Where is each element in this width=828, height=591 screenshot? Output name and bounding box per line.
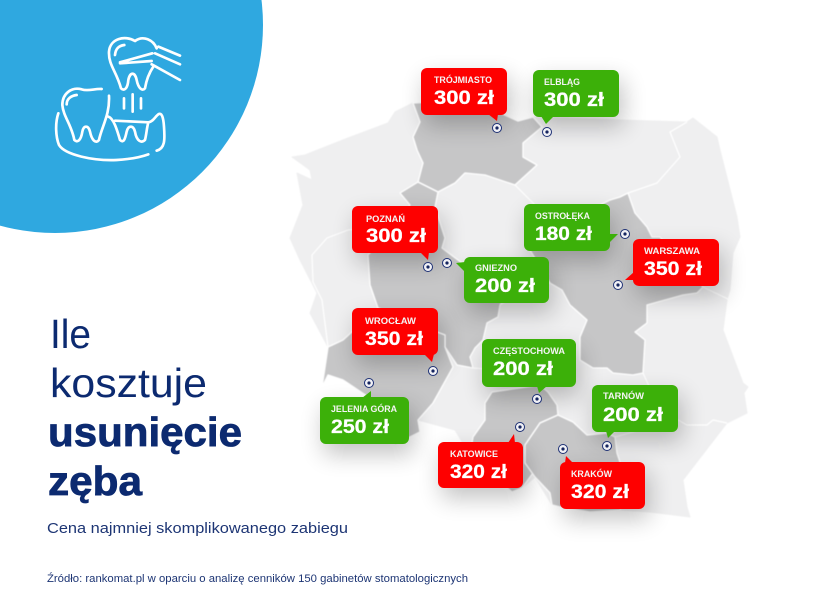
callout: Warszawa <box>625 239 719 286</box>
callout: Tarnow <box>592 385 678 438</box>
callout: Gniezno: 200 zł <box>475 276 536 297</box>
pin: Gniezno <box>442 258 452 268</box>
callout: Ostroleka: OSTROŁĘKA <box>535 211 590 221</box>
region: Mazowieckie <box>530 193 703 375</box>
region: Dolnoslaskie <box>322 308 453 445</box>
region borders <box>312 122 730 437</box>
callout: Krakow <box>560 456 645 509</box>
callout: Krakow: KRAKÓW <box>571 468 612 479</box>
callout: Czestochowa: 200 zł <box>493 359 554 380</box>
callout: Elblag <box>533 70 619 124</box>
pin: Tarnow <box>602 442 612 450</box>
pin: Poznan <box>424 262 432 272</box>
pin: Elblag <box>542 128 552 136</box>
callout: Poznan: 300 zł <box>366 226 427 247</box>
pin: Katowice <box>516 422 524 432</box>
callout: Katowice <box>438 434 523 488</box>
callout: Jelenia Gora: JELENIA GÓRA <box>331 403 397 414</box>
pin: Warszawa <box>614 280 622 290</box>
callout: Trojmiasto: 300 zł <box>434 88 495 109</box>
pin: Wroclaw <box>428 366 438 376</box>
map of Poland <box>290 100 748 517</box>
region: Malopolskie <box>525 415 628 512</box>
title: zęba <box>48 458 143 504</box>
region: Slaskie <box>470 385 558 492</box>
source note: Źródło: rankomat.pl w oparciu o analizę cenników 150 gabinetów stomatologicznych <box>47 572 468 585</box>
callout: Wroclaw <box>352 308 438 362</box>
map base: light regions <box>290 100 748 517</box>
callout shadows <box>324 78 723 519</box>
callout: Ostroleka <box>524 204 618 251</box>
callout: Elblag: ELBLĄG <box>544 77 580 87</box>
callout: Elblag: 300 zł <box>544 90 605 111</box>
callout: Katowice: 320 zł <box>450 462 508 483</box>
callout: Trojmiasto: TRÓJMIASTO <box>434 74 492 85</box>
title: kosztuje <box>50 360 207 406</box>
callout: Tarnow: 200 zł <box>603 405 664 426</box>
callout: Wroclaw: 350 zł <box>365 329 424 350</box>
callout: Wroclaw: WROCŁAW <box>365 316 417 326</box>
callout: Czestochowa: CZĘSTOCHOWA <box>493 346 566 356</box>
callout: Warszawa: WARSZAWA <box>644 246 701 256</box>
blue corner circle <box>0 0 263 233</box>
callout: Jelenia Gora: 250 zł <box>331 417 390 438</box>
callout: Gniezno: GNIEZNO <box>475 263 517 273</box>
title <box>48 311 242 504</box>
pin: Jelenia Gora <box>364 378 374 388</box>
region: Wielkopolskie <box>368 182 510 368</box>
callout: Ostroleka: 180 zł <box>535 224 593 245</box>
callout: Poznan: POZNAŃ <box>366 214 405 224</box>
title: usunięcie <box>48 409 242 455</box>
callout: Tarnow: TARNÓW <box>603 390 645 401</box>
pin: Krakow <box>558 444 568 454</box>
subtitle: Cena najmniej skomplikowanego zabiegu <box>47 520 348 537</box>
callout: Katowice: KATOWICE <box>450 449 498 459</box>
callout: Trojmiasto <box>421 68 507 121</box>
callout: Czestochowa <box>482 339 576 393</box>
pin: Ostroleka <box>620 230 630 238</box>
pin: Trojmiasto <box>492 124 502 132</box>
callout: Warszawa: 350 zł <box>644 259 703 280</box>
callout: Gniezno <box>456 257 549 303</box>
title: Ile <box>50 311 91 357</box>
callout: Krakow: 320 zł <box>571 482 630 503</box>
pin: Czestochowa <box>532 394 542 404</box>
callout: Jelenia Gora <box>320 391 409 444</box>
callout: Poznan <box>352 206 438 260</box>
region: Pomorskie <box>413 100 542 192</box>
icon: tooth extraction <box>56 38 180 160</box>
